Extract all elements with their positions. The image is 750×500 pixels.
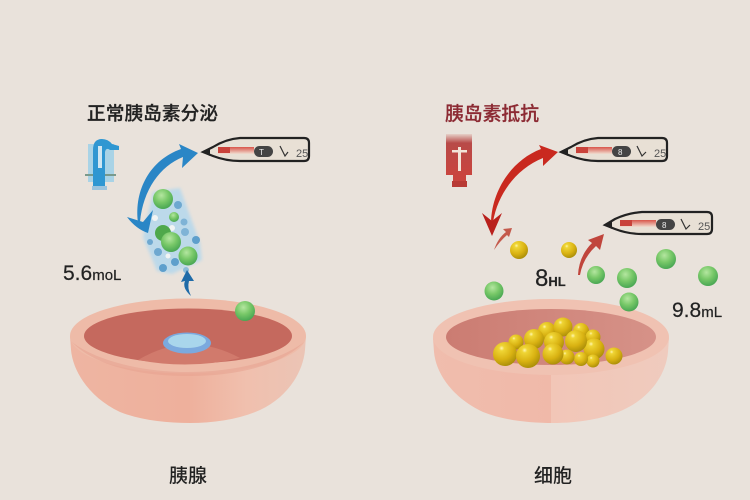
cluster: insulin granules: [143, 188, 202, 274]
bowl: cell: [433, 299, 669, 423]
insulin balls: [153, 189, 198, 266]
bowl: pancreas: [70, 298, 306, 423]
meter: lower right: 25: [698, 221, 710, 233]
arrow: small red: [494, 228, 512, 250]
label: 5.6 value: 5.6moL: [63, 262, 121, 285]
panel: insulin resistance: [433, 103, 722, 487]
title: insulin resistance: 胰岛素抵抗: [445, 103, 539, 124]
meter: left glucose meter: T: [259, 148, 264, 157]
floating gold balls: [510, 241, 577, 259]
arrow: blue curved up to meter: [137, 144, 198, 222]
label: 8 value: 8HL: [535, 265, 566, 292]
meter: lower right: [604, 212, 712, 234]
icon: red syringe: [446, 134, 472, 187]
label: pancreas: 胰腺: [169, 465, 207, 487]
floating green balls: [484, 249, 718, 312]
gold ball pile: [493, 318, 622, 368]
icon: blue dish: [163, 332, 211, 354]
arrow: small blue up: [181, 270, 194, 296]
icon: blue device: [85, 139, 119, 190]
label: 9.8 value: 9.8mL: [672, 299, 722, 322]
meter: upper right: 25: [654, 148, 666, 160]
meter: upper right: [560, 138, 667, 161]
label: cell: 细胞: [534, 465, 572, 487]
meter: left glucose meter: [202, 138, 309, 161]
meter: lower right: 8: [662, 221, 667, 230]
arrow: blue head pointing down-left: [127, 210, 153, 233]
arrow: red double curved: [482, 145, 558, 236]
meter: left glucose meter: 25: [296, 148, 308, 160]
panel: normal insulin secretion: [63, 103, 309, 487]
arrow: thin red up to meter: [578, 234, 604, 275]
meter: upper right: 8: [618, 148, 623, 157]
green ball on rim: [235, 301, 255, 321]
title: normal secretion: 正常胰岛素分泌: [87, 103, 218, 124]
